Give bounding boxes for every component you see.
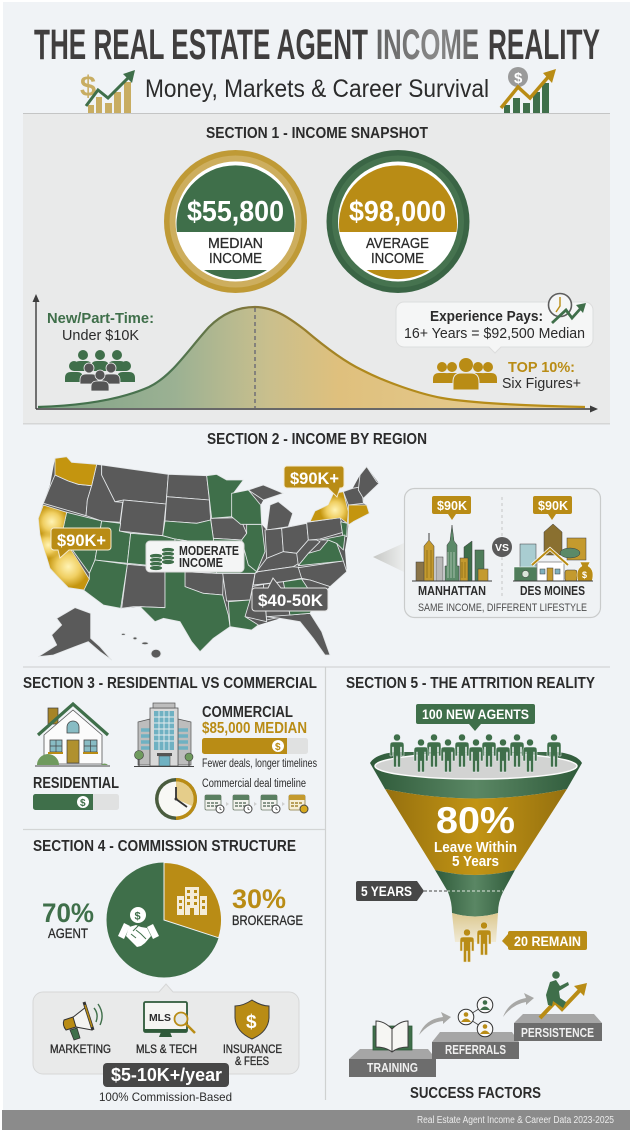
label: 70 percent agent: 70%: [42, 898, 94, 928]
label: $90K+ northeast: [284, 466, 344, 497]
step: referrals: [432, 1032, 519, 1059]
commercial deal timeline: Commercial deal timeline: [202, 778, 306, 790]
panel: Manhattan vs Des Moines: [404, 488, 600, 618]
badge: average income: AVERAGE: [366, 236, 429, 252]
icon: handshake with coin: $: [134, 910, 141, 922]
stat: 80 percent leave: 5 Years: [452, 854, 499, 870]
panel: section 5 attrition reality: [346, 675, 602, 1102]
label: moderate income: [146, 541, 244, 572]
label: 30 percent brokerage: BROKERAGE: [232, 913, 303, 928]
panel: section 1 income snapshot: [23, 113, 610, 424]
icon: green bars with gold arrow: $: [514, 70, 523, 87]
arrow: map to comparison: [373, 543, 404, 572]
commercial stats: $85,000 MEDIAN: [202, 720, 307, 737]
callout: experience pays: 16+ Years = $92,500 Median: [404, 325, 585, 342]
arrow: referrals to persistence: [503, 993, 534, 1017]
expense labels: [50, 1044, 282, 1068]
callout: experience pays: [396, 294, 593, 353]
tag: Manhattan income: $90K: [437, 498, 468, 513]
expense labels: INSURANCE: [223, 1044, 282, 1056]
income distribution curve: [32, 294, 598, 412]
badge: average income: [326, 150, 470, 293]
icon: referral network: [458, 997, 493, 1037]
section 5 heading: SECTION 5 - THE ATTRITION REALITY: [346, 675, 595, 692]
tag: Des Moines income: [533, 496, 572, 520]
callout: experience pays: Experience Pays:: [430, 308, 543, 325]
icon: versus badge: VS: [495, 542, 509, 554]
tag: 100 new agents: 100 NEW AGENTS: [422, 707, 529, 722]
badge: average income: INCOME: [371, 251, 424, 267]
icon: gold bars with green arrow: $: [80, 71, 96, 103]
stat: 80 percent leave: [434, 800, 517, 870]
label: new and part-time: [47, 310, 154, 344]
section 1 heading: SECTION 1 - INCOME SNAPSHOT: [206, 125, 428, 142]
tag: 5 years: [356, 881, 503, 901]
step: persistence: [514, 1014, 602, 1041]
icon: gold bars with green arrow: [80, 70, 135, 113]
city labels: DES MOINES: [520, 584, 585, 598]
tag: 20 remain: [502, 931, 587, 950]
badge: average income: $98,000: [349, 196, 446, 228]
commercial stats: [202, 704, 317, 770]
US map by income region: [35, 457, 379, 660]
label: new and part-time: Under $10K: [62, 327, 139, 344]
icon: Des Moines skyline and house: $: [582, 570, 587, 580]
label: $90K+ west coast: [51, 528, 111, 558]
icon: clock and rising arrow: [548, 294, 586, 323]
annual expense pill: $5-10K+/year: [111, 1064, 222, 1085]
label: top 10 percent: Six Figures+: [502, 375, 581, 392]
label: new and part-time: New/Part-Time:: [47, 310, 154, 327]
icon: new agents crowd: [390, 734, 561, 772]
icon: megaphone: [63, 1002, 102, 1040]
label: moderate income: INCOME: [179, 556, 223, 570]
icon: green and gray people group: [65, 350, 135, 391]
icon: brokerage building: [177, 887, 207, 915]
icon: versus badge: [492, 537, 512, 557]
tag: Manhattan income: [432, 496, 471, 520]
icon: insurance shield: [235, 1000, 269, 1039]
label: 30 percent brokerage: [232, 884, 303, 928]
icon: green bars with gold arrow: [501, 67, 556, 113]
footer bar: [2, 1110, 630, 1130]
title: INCOME: [376, 21, 479, 69]
step: training: TRAINING: [367, 1061, 418, 1075]
subtitle: Money, Markets & Career Survival: [145, 75, 489, 103]
section 3 heading: SECTION 3 - RESIDENTIAL VS COMMERCIAL: [23, 675, 317, 692]
icon: MLS monitor: [144, 1002, 195, 1037]
comparison caption: SAME INCOME, DIFFERENT LIFESTYLE: [418, 602, 587, 614]
panel: section 3 residential vs commercial: [23, 675, 317, 820]
icon: MLS monitor: MLS: [149, 1012, 171, 1024]
success factors caption: SUCCESS FACTORS: [410, 1085, 541, 1102]
icon: Des Moines skyline and house: [514, 524, 593, 581]
label: moderate income: MODERATE: [179, 544, 239, 558]
icon: open book: [373, 1021, 412, 1052]
label: top 10 percent: [502, 359, 581, 392]
label: top 10 percent: TOP 10%:: [508, 359, 575, 376]
tag: 5 years: 5 YEARS: [361, 884, 412, 899]
pie chart: commission split: [106, 862, 222, 978]
icon: insurance shield: $: [246, 1012, 257, 1033]
step: training: [349, 1049, 436, 1077]
commercial stats: Fewer deals, longer timelines: [202, 756, 317, 770]
icon: runner with rising arrow: [540, 971, 587, 1018]
expense labels: MLS & TECH: [136, 1044, 197, 1056]
badge: median income: $55,800: [187, 196, 284, 228]
city labels: MANHATTAN: [418, 584, 486, 598]
panel: section 4 commission structure: [33, 838, 303, 1104]
residential stats: RESIDENTIAL: [33, 775, 119, 792]
commercial deal timeline: [202, 778, 308, 813]
icon: two remaining agents: [460, 922, 491, 962]
badge: median income: MEDIAN: [208, 236, 263, 252]
label: $40-50K south: $40-50K: [258, 591, 324, 610]
title: THE REAL ESTATE AGENT: [34, 21, 368, 69]
tag: 20 remain: 20 REMAIN: [514, 934, 581, 949]
icon: office building: [134, 703, 194, 766]
label: $40-50K south: [252, 578, 328, 611]
label: 70 percent agent: AGENT: [48, 926, 88, 941]
icon: Manhattan skyline: [416, 525, 488, 581]
commercial stats: $: [275, 742, 281, 753]
section 4 heading: SECTION 4 - COMMISSION STRUCTURE: [33, 838, 296, 855]
icon: house: [35, 704, 110, 766]
icon: timeline clock: [155, 778, 197, 820]
label: $90K+ west coast: $90K+: [57, 531, 106, 550]
city labels: [418, 584, 585, 598]
caption: commission-based: 100% Commission-Based: [99, 1090, 232, 1104]
residential stats: [33, 775, 119, 810]
stat: 80 percent leave: 80%: [436, 800, 515, 841]
commercial stats: COMMERCIAL: [202, 704, 293, 721]
label: 70 percent agent: [42, 898, 94, 941]
label: 30 percent brokerage: 30%: [232, 884, 286, 914]
step: persistence: PERSISTENCE: [521, 1026, 594, 1040]
icon: gold top earner group: [433, 358, 497, 390]
step: referrals: REFERRALS: [445, 1043, 506, 1057]
section 2 heading: SECTION 2 - INCOME BY REGION: [207, 431, 427, 448]
arrow: training to referrals: [419, 1012, 451, 1035]
icon: coin stacks: [150, 548, 174, 570]
residential stats: $: [80, 798, 86, 809]
stat: 80 percent leave: Leave Within: [434, 840, 517, 856]
expense labels: MARKETING: [50, 1044, 111, 1056]
badge: median income: [164, 150, 307, 293]
funnel: [370, 752, 582, 942]
tag: 100 new agents: [416, 704, 535, 731]
tag: Des Moines income: $90K: [538, 498, 569, 513]
label: $90K+ northeast: $90K+: [290, 469, 339, 488]
panel: agent expenses: [33, 984, 299, 1074]
expense labels: & FEES: [235, 1056, 269, 1068]
badge: median income: INCOME: [209, 251, 262, 267]
